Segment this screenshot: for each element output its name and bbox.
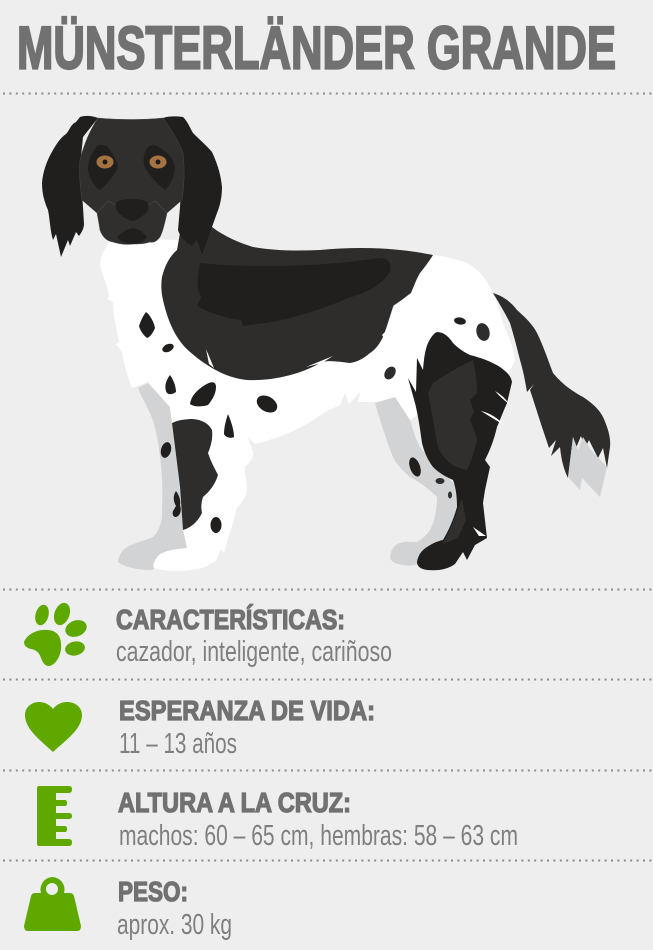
row: characteristics bbox=[24, 601, 392, 668]
heading: PESO: bbox=[118, 876, 188, 907]
row: life expectancy bbox=[25, 695, 375, 760]
icon: weight bbox=[24, 877, 81, 931]
dog: rear leg highlight bbox=[428, 360, 477, 470]
dog: right eye bbox=[150, 156, 166, 168]
dog: left ear bbox=[42, 116, 98, 257]
text: machos: 60 – 65 cm, hembras: 58 – 63 cm bbox=[119, 820, 518, 852]
heading: ALTURA A LA CRUZ: bbox=[118, 787, 351, 818]
dog: near rear leg bbox=[408, 332, 512, 570]
dog: rear leg fur strokes bbox=[473, 391, 509, 536]
text: cazador, inteligente, cariñoso bbox=[116, 636, 392, 668]
text: 11 – 13 años bbox=[119, 728, 237, 760]
dog: spots bbox=[139, 312, 492, 533]
heading: ESPERANZA DE VIDA: bbox=[119, 695, 375, 726]
illustration: dog bbox=[42, 116, 610, 571]
row: height bbox=[37, 786, 518, 852]
dog: lower rear leg highlight bbox=[443, 498, 466, 544]
dog: fur nicks bbox=[206, 293, 412, 368]
dog: mouth bbox=[117, 228, 147, 244]
dog: right ear bbox=[163, 116, 222, 255]
icon: paw bbox=[24, 601, 89, 666]
dog: left eye patch bbox=[88, 145, 118, 190]
dog: muzzle outline bbox=[97, 201, 167, 213]
dog: nose bbox=[116, 199, 149, 221]
dog: face bbox=[80, 118, 184, 244]
heading: CARACTERÍSTICAS: bbox=[116, 604, 345, 635]
dog: far rear leg bbox=[375, 397, 460, 566]
dog: tail tip bbox=[568, 437, 607, 497]
dog: front leg patch bbox=[172, 419, 218, 530]
dog: saddle shadow bbox=[197, 258, 391, 326]
dog: far front leg bbox=[118, 383, 187, 570]
dog: white body bbox=[100, 238, 515, 571]
dog: tail bbox=[493, 293, 610, 478]
dog: right eye patch bbox=[144, 145, 175, 190]
icon: ruler bbox=[37, 786, 72, 846]
text: aprox. 30 kg bbox=[117, 909, 232, 941]
dog: left eye bbox=[96, 156, 114, 168]
row: weight bbox=[24, 876, 232, 941]
icon: heart bbox=[25, 702, 82, 752]
dog: black saddle bbox=[161, 227, 433, 380]
